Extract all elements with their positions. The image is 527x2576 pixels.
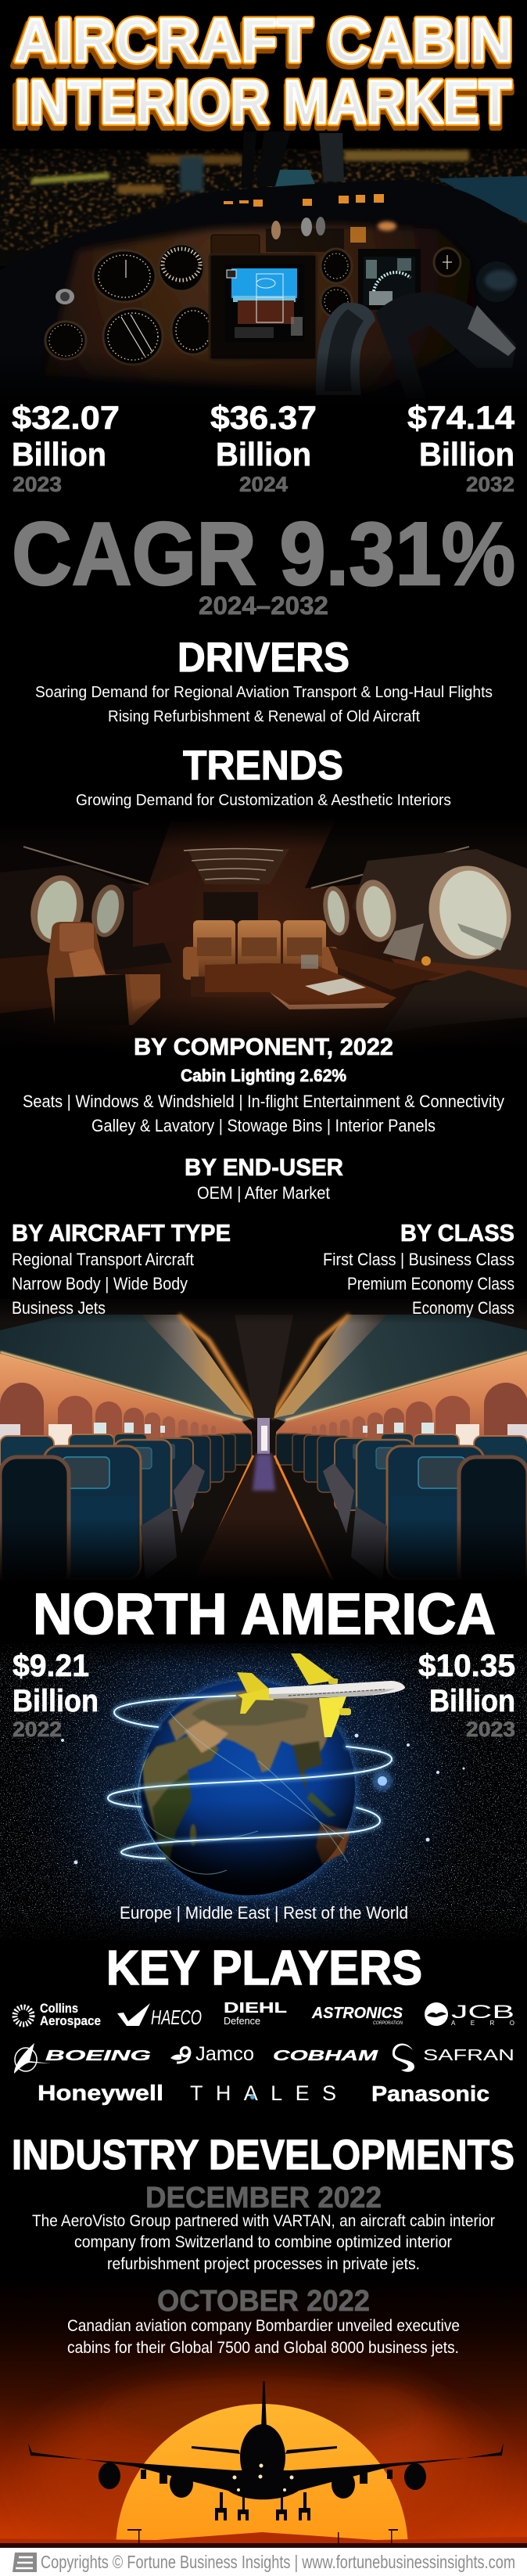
gauge cluster [45,244,461,365]
panel: by aircraft type [12,1219,231,1318]
panel: by aircraft type: Business Jets [12,1298,106,1318]
heading: drivers: DRIVERS [177,635,350,681]
logo: Safran [393,2044,514,2072]
footer [0,2548,527,2576]
logo: Astronics: CORPORATION [373,2021,403,2026]
logo: JCB Aero: AERO [451,2020,514,2027]
image: globe with airplane [0,1639,527,1945]
logo: Collins Aerospace: Aerospace [40,2013,101,2028]
logo: JCB Aero [425,2002,514,2027]
logo: Thales: THALES [190,2081,336,2105]
logo: Collins Aerospace: Collins [40,2001,78,2016]
primary flight display [225,264,304,342]
logo: Cobham: COBHAM [273,2048,379,2063]
heading: by component: BY COMPONENT, 2022 [134,1033,393,1060]
heading: north america: NORTH AMERICA [33,1581,496,1646]
logo: Astronics: ASTRONICS [311,2005,403,2022]
logo: Safran: SAFRAN [423,2047,514,2064]
stat: 2032 market size: Billion [419,436,514,473]
date: december 2022: DECEMBER 2022 [145,2182,382,2214]
panel: by aircraft type: Regional Transport Aircraft [12,1250,194,1269]
stat: north america 2022: $9.21 [13,1649,89,1683]
text: drivers list [35,684,493,725]
logo: Boeing [14,2043,151,2074]
stat: north america 2023 [418,1649,515,1741]
stat: north america 2022: 2022 [13,1718,62,1741]
stat: 2024 market size: $36.37 [210,399,317,436]
stat: 2024 market size: 2024 [239,473,288,496]
text: component segments [23,1092,504,1135]
stat: north america 2022: Billion [13,1684,99,1718]
icon: Fortune Business Insights logo [13,2553,37,2572]
navigation display [358,249,421,310]
logo: Collins Aerospace [15,2001,101,2028]
stat: 2024 market size: Billion [216,436,311,473]
stat: north america 2023: 2023 [466,1718,515,1741]
orbit rings [108,1696,392,1858]
logo: Jamco [170,2043,254,2065]
title: AIRCRAFT CABIN [15,5,513,74]
image: airplane landing at sunset [0,2277,527,2576]
text: other regions: Europe | Middle East | Rest of the World [120,1903,408,1923]
title: AIRCRAFT CABIN [12,10,512,79]
logo: Boeing: BOEING [45,2048,151,2063]
text: trends list: Growing Demand for Customization & Aesthetic Interiors [76,792,451,809]
icon: airplane silhouette [28,2381,504,2520]
panel: by aircraft type: BY AIRCRAFT TYPE [12,1219,231,1247]
center leather seats [183,920,338,997]
panel: by aircraft type: Narrow Body | Wide Body [12,1274,188,1293]
logo: HAECO: HAECO [151,2006,202,2029]
text: october development: cabins for their Global 7500 and Global 8000 business jets. [67,2339,459,2357]
heading: key players: KEY PLAYERS [106,1941,422,1995]
stat: 2032 market size: $74.14 [407,399,515,436]
text: december development: refurbishment project processes in private jets. [107,2255,420,2273]
continents [142,1689,350,1866]
heading: by end-user: BY END-USER [185,1153,343,1181]
logo: Panasonic: Panasonic [371,2081,489,2106]
logo: JCB Aero: JCB [451,2002,514,2023]
stat: 2023 market size: Billion [12,436,106,473]
stat: north america 2023: Billion [429,1684,515,1718]
image: economy cabin aisle [0,1293,527,1596]
text: october development: Canadian aviation company Bombardier unveiled executive [67,2317,460,2335]
logo: HAECO [117,2003,202,2029]
front leather armchair [47,922,160,1027]
laptop [383,923,424,961]
heading: trends: TRENDS [183,743,343,789]
text: drivers list: Rising Refurbishment & Renewal of Old Aircraft [108,708,420,725]
stat: 2023 market size [12,399,120,496]
panel: by class: BY CLASS [400,1219,514,1247]
wood table [205,963,396,1009]
highlight: cabin lighting share: Cabin Lighting 2.62% [181,1066,346,1085]
image: cockpit at night [0,131,527,407]
text: drivers list: Soaring Demand for Regional Aviation Transport & Long-Haul Flights [35,684,493,701]
panel: by class [323,1219,514,1318]
text: component segments: Galley & Lavatory | Stowage Bins | Interior Panels [91,1116,436,1135]
stat: 2032 market size: 2032 [466,473,514,496]
cabin windows [23,857,521,968]
logo: Jamco: Jamco [195,2043,254,2065]
title [12,5,513,141]
logo: Diehl Defence: Defence [224,2015,260,2027]
logo: Honeywell: Honeywell [38,2081,163,2105]
title: AIRCRAFT CABIN [15,5,513,74]
date: october 2022: OCTOBER 2022 [157,2285,370,2318]
stat: 2023 market size: 2023 [13,473,62,496]
text: end-user segments: OEM | After Market [197,1183,330,1203]
stat: 2024 market size [210,399,317,496]
image: luxury private jet cabin [0,818,527,1052]
stat: north america 2023: $10.35 [418,1649,515,1683]
icon: yellow-tailed airplane [237,1653,405,1737]
stat: north america 2022 [13,1649,99,1741]
CAGR period: 2024–2032 [199,592,328,620]
logo: Diehl Defence [224,2000,287,2027]
text: october development [67,2317,460,2357]
stat: 2023 market size: $32.07 [12,399,120,436]
logo: Diehl Defence: DIEHL [224,2000,287,2016]
text: december development: company from Switzerland to combine optimized interior [74,2233,452,2251]
stat: 2032 market size [407,399,515,496]
text: december development [32,2212,495,2273]
